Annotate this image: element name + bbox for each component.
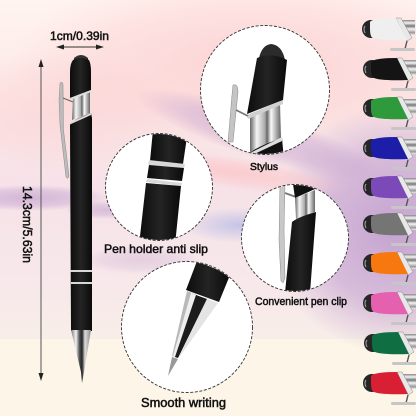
swatch: black [363, 58, 416, 91]
width label: 1cm/0.39in [50, 29, 109, 43]
panel: convenient pen clip detail [242, 184, 348, 293]
panel: stylus detail [200, 26, 330, 160]
swatch: pink [363, 292, 416, 325]
stylus label: Stylus [250, 161, 278, 173]
pen clip [59, 82, 69, 178]
pen holder label: Pen holder anti slip [104, 242, 208, 256]
swatch: green [363, 97, 416, 130]
smooth writing label: Smooth writing [141, 396, 226, 410]
width dimension arrow [56, 44, 104, 50]
height label: 14.3cm/5.63in [20, 186, 34, 263]
panel: pen holder anti slip detail [106, 130, 212, 245]
height dimension arrow [38, 59, 44, 381]
swatch: white [362, 18, 415, 51]
swatch: orange [363, 252, 416, 285]
swatch: dark green [364, 332, 416, 365]
swatch: purple [363, 176, 416, 209]
color swatches column [362, 18, 416, 405]
main pen [59, 55, 92, 383]
swatch: gray [363, 213, 416, 246]
swatch: red [363, 372, 416, 405]
convenient pen clip label: Convenient pen clip [255, 296, 347, 308]
swatch: blue [363, 137, 416, 170]
panel: smooth writing detail [122, 261, 252, 392]
